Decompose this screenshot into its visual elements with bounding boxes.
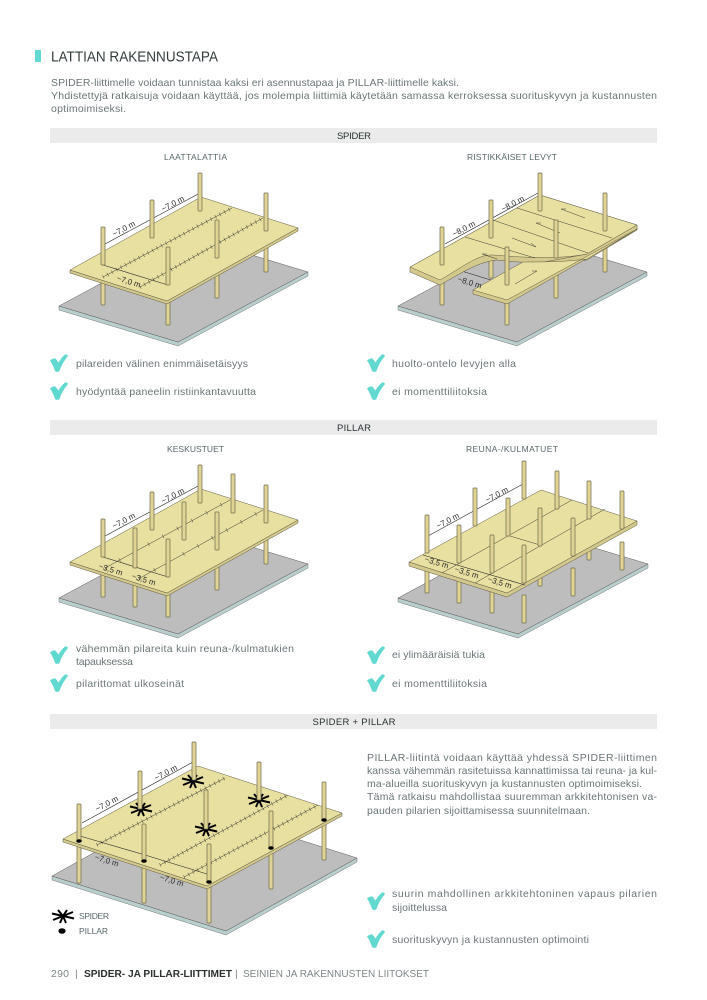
dimensions: ~7,0 m: [94, 794, 120, 814]
check list: keskustuet: vähemmän pilareita kuin reuna-/kulmatukien: [76, 643, 294, 655]
footer: [51, 968, 430, 980]
footer: |: [75, 968, 78, 980]
diagram: laattalattia: ~7,0 m: [111, 219, 137, 239]
check list: spider + pillar: suorituskyvyn ja kustannusten optimointi: [392, 934, 589, 946]
diagram: keskustuet: ~3,5 m: [98, 562, 124, 578]
section header: PILLAR: [50, 420, 657, 435]
diagram: spider + pillar: [52, 742, 357, 935]
check list: reuna-/kulmatuet: [367, 646, 487, 692]
diagram: ristikkäiset levyt: ~8,0 m: [451, 219, 477, 239]
legend: SPIDER: [79, 911, 109, 921]
check list: spider + pillar: sijoittelussa: [392, 902, 447, 914]
check list: reuna-/kulmatuet: ei ylimääräisiä tukia: [392, 649, 485, 661]
diagram: reuna-/kulmatuet: ~7,0 m: [484, 485, 510, 505]
check list: ristikkäiset levyt: ei momenttiliitoksia: [392, 386, 487, 398]
footer: 290: [51, 968, 69, 980]
paragraph: spider + pillar: pauden pilarien sijoittamisessa suunnitelmaan.: [367, 805, 590, 817]
section header: SPIDER + PILLAR: SPIDER + PILLAR: [312, 717, 396, 728]
section header: SPIDER: [50, 128, 657, 143]
diagram: reuna-/kulmatuet: ~7,0 m: [435, 511, 461, 531]
paragraph: spider + pillar: PILLAR-liitintä voidaan käyttää yhdessä SPIDER-liittimen: [367, 752, 657, 764]
pillar connectors: [76, 818, 327, 884]
subheading: KESKUSTUET: KESKUSTUET: [167, 444, 224, 454]
diagram: reuna-/kulmatuet: ~3,5 m: [424, 555, 450, 571]
diagram: ristikkäiset levyt: [398, 173, 647, 346]
intro text: SPIDER-liittimelle voidaan tunnistaa kaksi eri asennustapaa ja PILLAR-liittimelle kaksi.: [51, 77, 459, 89]
intro text: [51, 77, 657, 115]
title: LATTIAN RAKENNUSTAPA: [51, 50, 218, 66]
paragraph: spider + pillar: [367, 752, 658, 817]
subheading: REUNA-/KULMATUET: REUNA-/KULMATUET: [466, 444, 558, 454]
check list: ristikkäiset levyt: huolto-ontelo levyjen alla: [392, 358, 516, 370]
section header: SPIDER: SPIDER: [337, 131, 371, 142]
paragraph: spider + pillar: Tämä ratkaisu mahdollistaa suuremman arkkitehtonisen va-: [367, 791, 658, 803]
intro text: Yhdistettyjä ratkaisuja voidaan käyttää, jos molempia liittimiä käytetään samassa kerroksessa suorituskyvyn ja kustannusten: [51, 90, 657, 102]
check list: keskustuet: [50, 643, 294, 692]
dimensions: ~7,0 m: [94, 853, 120, 869]
diagram: laattalattia: ~7,0 m: [160, 194, 186, 214]
check list: spider + pillar: [367, 888, 657, 948]
diagram: ristikkäiset levyt: ~8,0 m: [500, 194, 526, 214]
section header: SPIDER + PILLAR: [50, 714, 657, 729]
dimensions: ~7,0 m: [153, 763, 179, 783]
check list: ristikkäiset levyt: [367, 354, 516, 400]
check list: laattalattia: hyödyntää paneelin ristiinkantavuutta: [76, 386, 256, 398]
legend: [52, 910, 109, 936]
upper pillars: [77, 742, 326, 882]
diagram: reuna-/kulmatuet: [398, 461, 648, 638]
diagram: laattalattia: [59, 173, 308, 346]
diagram: laattalattia: ~7,0 m: [116, 274, 142, 290]
dimensions: [94, 763, 185, 889]
diagram: ristikkäiset levyt: ~8,0 m: [457, 275, 483, 291]
paragraph: spider + pillar: kanssa vähemmän rasitetuissa kannattimissa tai reuna- ja kul-: [367, 765, 658, 777]
check list: spider + pillar: suurin mahdollinen arkkitehtoninen vapaus pilarien: [392, 888, 657, 900]
dimensions: ~7,0 m: [159, 873, 185, 889]
check list: laattalattia: pilareiden välinen enimmäisetäisyys: [76, 358, 248, 370]
diagram: keskustuet: ~3,5 m: [131, 572, 157, 588]
check list: laattalattia: [50, 354, 256, 400]
footer: |: [235, 968, 238, 980]
diagram: keskustuet: ~7,0 m: [111, 511, 137, 531]
check list: keskustuet: tapauksessa: [76, 656, 133, 668]
paragraph: spider + pillar: ma-alueilla suorituskyvyn ja kustannusten optimoimiseksi.: [367, 778, 642, 790]
check list: keskustuet: pilarittomat ulkoseinät: [76, 678, 184, 690]
diagram: reuna-/kulmatuet: ~3,5 m: [454, 565, 480, 581]
spider connectors: [130, 775, 270, 836]
diagram: keskustuet: ~7,0 m: [160, 486, 186, 506]
subheading: LAATTALATTIA: LAATTALATTIA: [164, 152, 227, 162]
check list: reuna-/kulmatuet: ei momenttiliitoksia: [392, 678, 487, 690]
subheading: RISTIKKÄISET LEVYT: RISTIKKÄISET LEVYT: [467, 152, 557, 162]
footer: SPIDER- JA PILLAR-LIITTIMET: [84, 968, 233, 980]
intro text: optimoimiseksi.: [51, 103, 126, 115]
diagram: keskustuet: [59, 465, 308, 638]
legend: PILLAR: [79, 926, 108, 936]
footer: SEINIEN JA RAKENNUSTEN LIITOKSET: [243, 968, 430, 980]
diagram: reuna-/kulmatuet: ~3,5 m: [487, 575, 513, 591]
section header: PILLAR: PILLAR: [337, 423, 371, 434]
